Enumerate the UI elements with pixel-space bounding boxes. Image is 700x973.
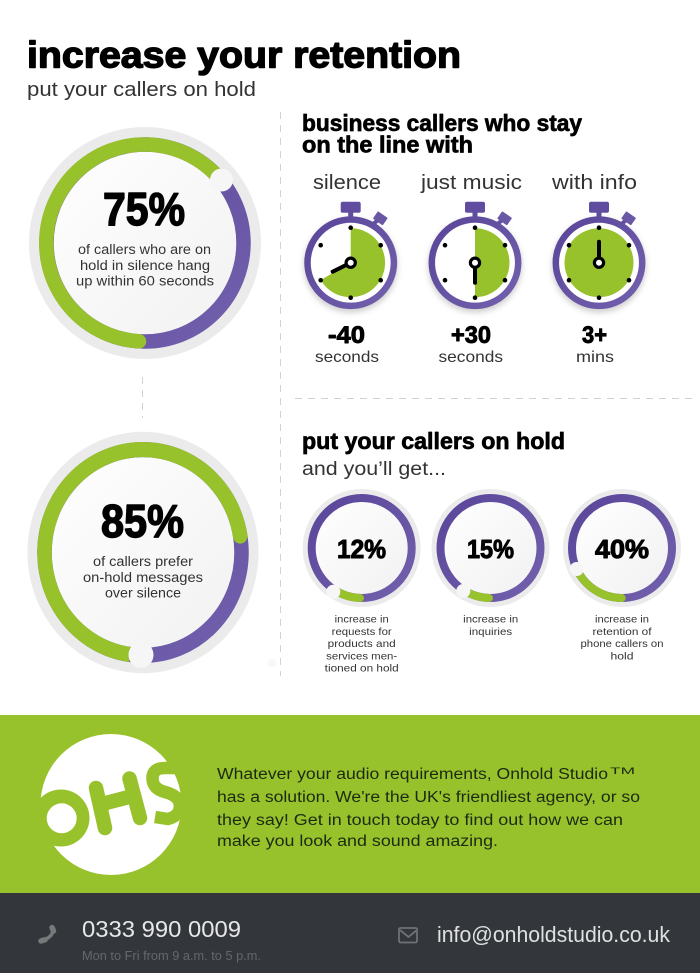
panel: green banner [0, 715, 700, 893]
caption 85%: of callers prefer [93, 554, 194, 569]
caption: 12%: requests for [332, 626, 392, 638]
heading: business callers [302, 110, 582, 158]
icon: email [399, 928, 417, 942]
statistic 85%: 85% [101, 495, 184, 547]
value: -40 seconds: seconds [315, 349, 379, 366]
caption: 40%: increase in [595, 614, 649, 626]
icon: stopwatch just music [428, 202, 522, 313]
caption 85%: on-hold messages [83, 570, 203, 585]
logo: OHS [32, 734, 186, 875]
icon: stopwatch silence [304, 202, 398, 313]
value: 3+ mins: mins [576, 349, 614, 366]
caption 75%: of callers who are on [78, 242, 211, 257]
value: +30 seconds: seconds [438, 349, 503, 366]
donut: 15% [432, 489, 550, 607]
statistic 75%: 75% [103, 183, 185, 235]
phone number: 0333 990 0009 [82, 916, 241, 942]
caption: 40%: phone callers on [580, 638, 664, 650]
caption: 15% [463, 614, 518, 638]
caption: 12%: increase in [335, 614, 389, 626]
donut: 40% [563, 489, 681, 607]
statistic 12%: 12% [337, 534, 386, 564]
banner text: Whatever your audio requirements, Onhold Studio [217, 766, 608, 783]
banner text: TM [610, 766, 635, 776]
caption: 12% [325, 614, 399, 675]
green progress arc 75% [46, 144, 221, 341]
caption 85% [83, 554, 203, 600]
value: 3+ mins: 3+ [582, 322, 607, 349]
caption 75% [76, 242, 214, 288]
opening hours: Mon to Fri from 9 a.m. to 5 p.m. [82, 948, 261, 963]
panel: 75% donut [29, 127, 261, 359]
value: 3+ mins [576, 322, 614, 366]
arc knob [210, 168, 233, 192]
value: +30 seconds [438, 322, 503, 366]
heading: business callers: on the line with [302, 132, 473, 158]
caption: 40% [580, 614, 664, 662]
caption 75%: up within 60 seconds [76, 274, 214, 288]
icon: phone [41, 928, 54, 941]
value: -40 seconds: -40 [328, 322, 365, 349]
donut: 12% [303, 489, 421, 607]
caption: 40%: retention of [592, 626, 652, 638]
heading: business callers: business callers who stay [302, 110, 582, 136]
banner text: has a solution. We're the UK's friendliest agency, or so [217, 789, 640, 806]
heading: put your callers on hold: put your callers on hold [302, 428, 565, 454]
caption: 12%: products and [328, 638, 396, 650]
label: just music: just music [420, 172, 522, 194]
subheading: and you’ll get... [302, 459, 446, 480]
label: with info: with info [551, 172, 637, 194]
banner text: they say! Get in touch today to find out how we can [217, 812, 623, 829]
caption: 12%: services men- [326, 650, 398, 662]
caption: 40%: hold [610, 650, 634, 662]
value: +30 seconds: +30 [451, 322, 491, 349]
caption: 15%: inquiries [469, 626, 512, 638]
banner text: make you look and sound amazing. [217, 833, 498, 850]
statistic 40%: 40% [595, 534, 649, 564]
title: increase your retention [27, 34, 461, 76]
panel: 85% donut [28, 432, 258, 673]
caption 75%: hold in silence hang [80, 258, 210, 273]
banner text [217, 766, 640, 850]
statistic 15%: 15% [467, 534, 514, 564]
subtitle: put your callers on hold [27, 79, 256, 101]
caption: 12%: tioned on hold [325, 663, 399, 675]
label: silence: silence [313, 172, 381, 194]
icon: stopwatch with info [552, 202, 646, 313]
panel: contact bar [0, 893, 700, 973]
value: -40 seconds [315, 322, 379, 366]
email address: info@onholdstudio.co.uk [437, 922, 671, 947]
caption: 15%: increase in [463, 614, 518, 626]
caption 85%: over silence [105, 586, 181, 600]
